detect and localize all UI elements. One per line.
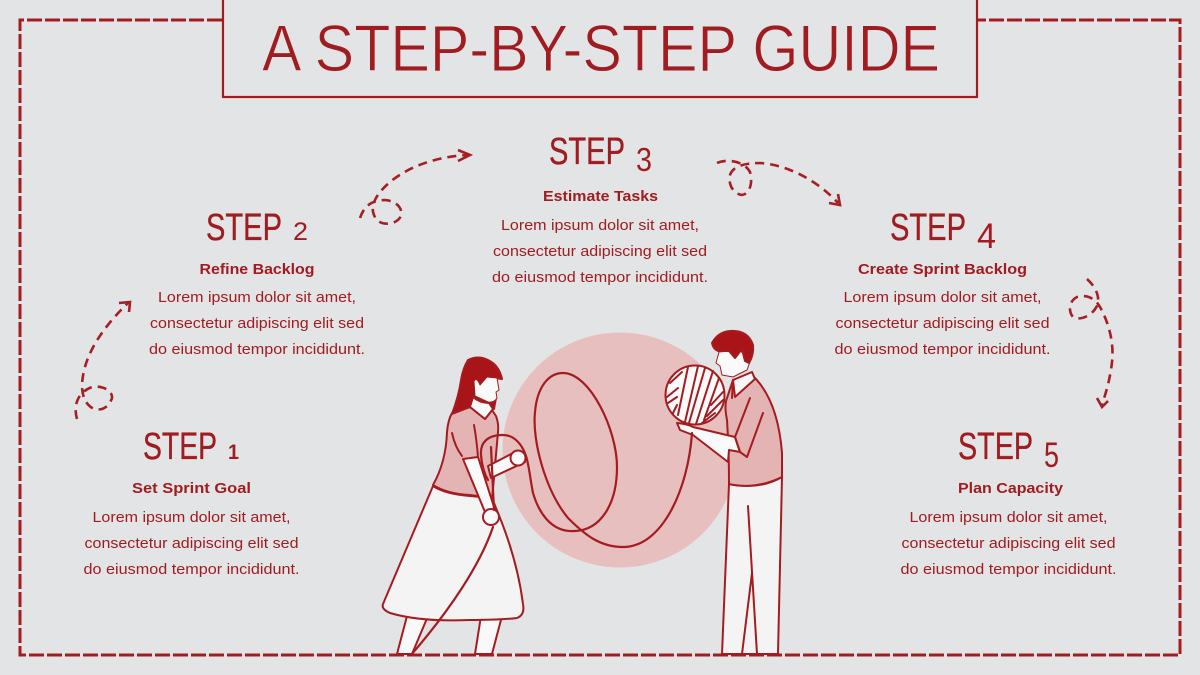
step 5 body: Lorem ipsum dolor sit amet, [910,510,1108,526]
step 5 heading: STEP [958,426,1033,468]
step 5 subtitle: Plan Capacity [958,481,1063,497]
step 2 heading: 2 [293,218,308,246]
step 1 heading: 1 [228,441,239,464]
step 2 [149,207,365,358]
man torso [726,378,782,486]
step 2 body [149,290,365,358]
step 3 heading: 3 [636,141,652,178]
man sleeve lines [735,398,763,457]
step 1 heading: STEP [143,426,217,468]
step 5 body: consectetur adipiscing elit sed [902,536,1116,552]
man arm and hand [677,423,740,462]
step 3 body: do eiusmod tempor incididunt. [492,270,708,286]
woman skirt [383,486,523,620]
arrow: step 2 to step 3 [360,150,470,224]
step 5 [900,426,1116,578]
illustration: yarn strand [411,373,692,655]
step 1 body [84,510,300,578]
illustration: man holding yarn ball [666,331,782,654]
yarn ball [666,366,724,424]
step 3 body: consectetur adipiscing elit sed [493,244,707,260]
step 4 subtitle: Create Sprint Backlog [858,262,1027,278]
step 2 body: do eiusmod tempor incididunt. [149,342,365,358]
man collar [733,372,755,397]
step 2 heading: STEP [206,207,282,249]
step 1 body: Lorem ipsum dolor sit amet, [92,510,290,526]
step 3 subtitle: Estimate Tasks [543,189,658,205]
step 1 body: do eiusmod tempor incididunt. [84,562,300,578]
step 3 heading: STEP [549,131,625,173]
step 5 body: do eiusmod tempor incididunt. [900,562,1116,578]
step 4 body: Lorem ipsum dolor sit amet, [844,290,1042,306]
woman legs [397,616,502,654]
man trousers [722,477,782,654]
woman face and collar [474,377,499,402]
step 1 body: consectetur adipiscing elit sed [84,536,298,552]
step 4 body [834,290,1050,358]
step 1 subtitle: Set Sprint Goal [132,481,251,497]
step 4 heading: 4 [977,217,996,256]
step 5 body [900,510,1116,578]
step 5 heading: 5 [1044,436,1059,475]
step 1 [84,426,300,578]
title [223,0,977,97]
step 2 body: Lorem ipsum dolor sit amet, [158,290,356,306]
step 4 heading: STEP [890,207,966,249]
man face [716,350,750,377]
arrow: step 4 to step 5 [1070,279,1112,407]
step 3 [492,131,708,286]
woman hair [452,358,502,414]
woman torso [433,407,498,500]
step 2 body: consectetur adipiscing elit sed [150,316,364,332]
illustration: woman holding yarn [383,358,526,654]
arrow: step 1 to step 2 [76,302,130,419]
step 4 body: consectetur adipiscing elit sed [836,316,1050,332]
step 2 subtitle: Refine Backlog [200,262,314,278]
illustration: background circle [502,332,738,568]
step 4 [834,207,1050,358]
title: A STEP-BY-STEP GUIDE [262,11,940,85]
man hair [712,331,753,363]
step 3 body [492,218,708,286]
woman arm and hand [474,425,478,458]
arrow: step 3 to step 4 [717,161,840,205]
step 3 body: Lorem ipsum dolor sit amet, [501,218,699,234]
step 4 body: do eiusmod tempor incididunt. [834,342,1050,358]
